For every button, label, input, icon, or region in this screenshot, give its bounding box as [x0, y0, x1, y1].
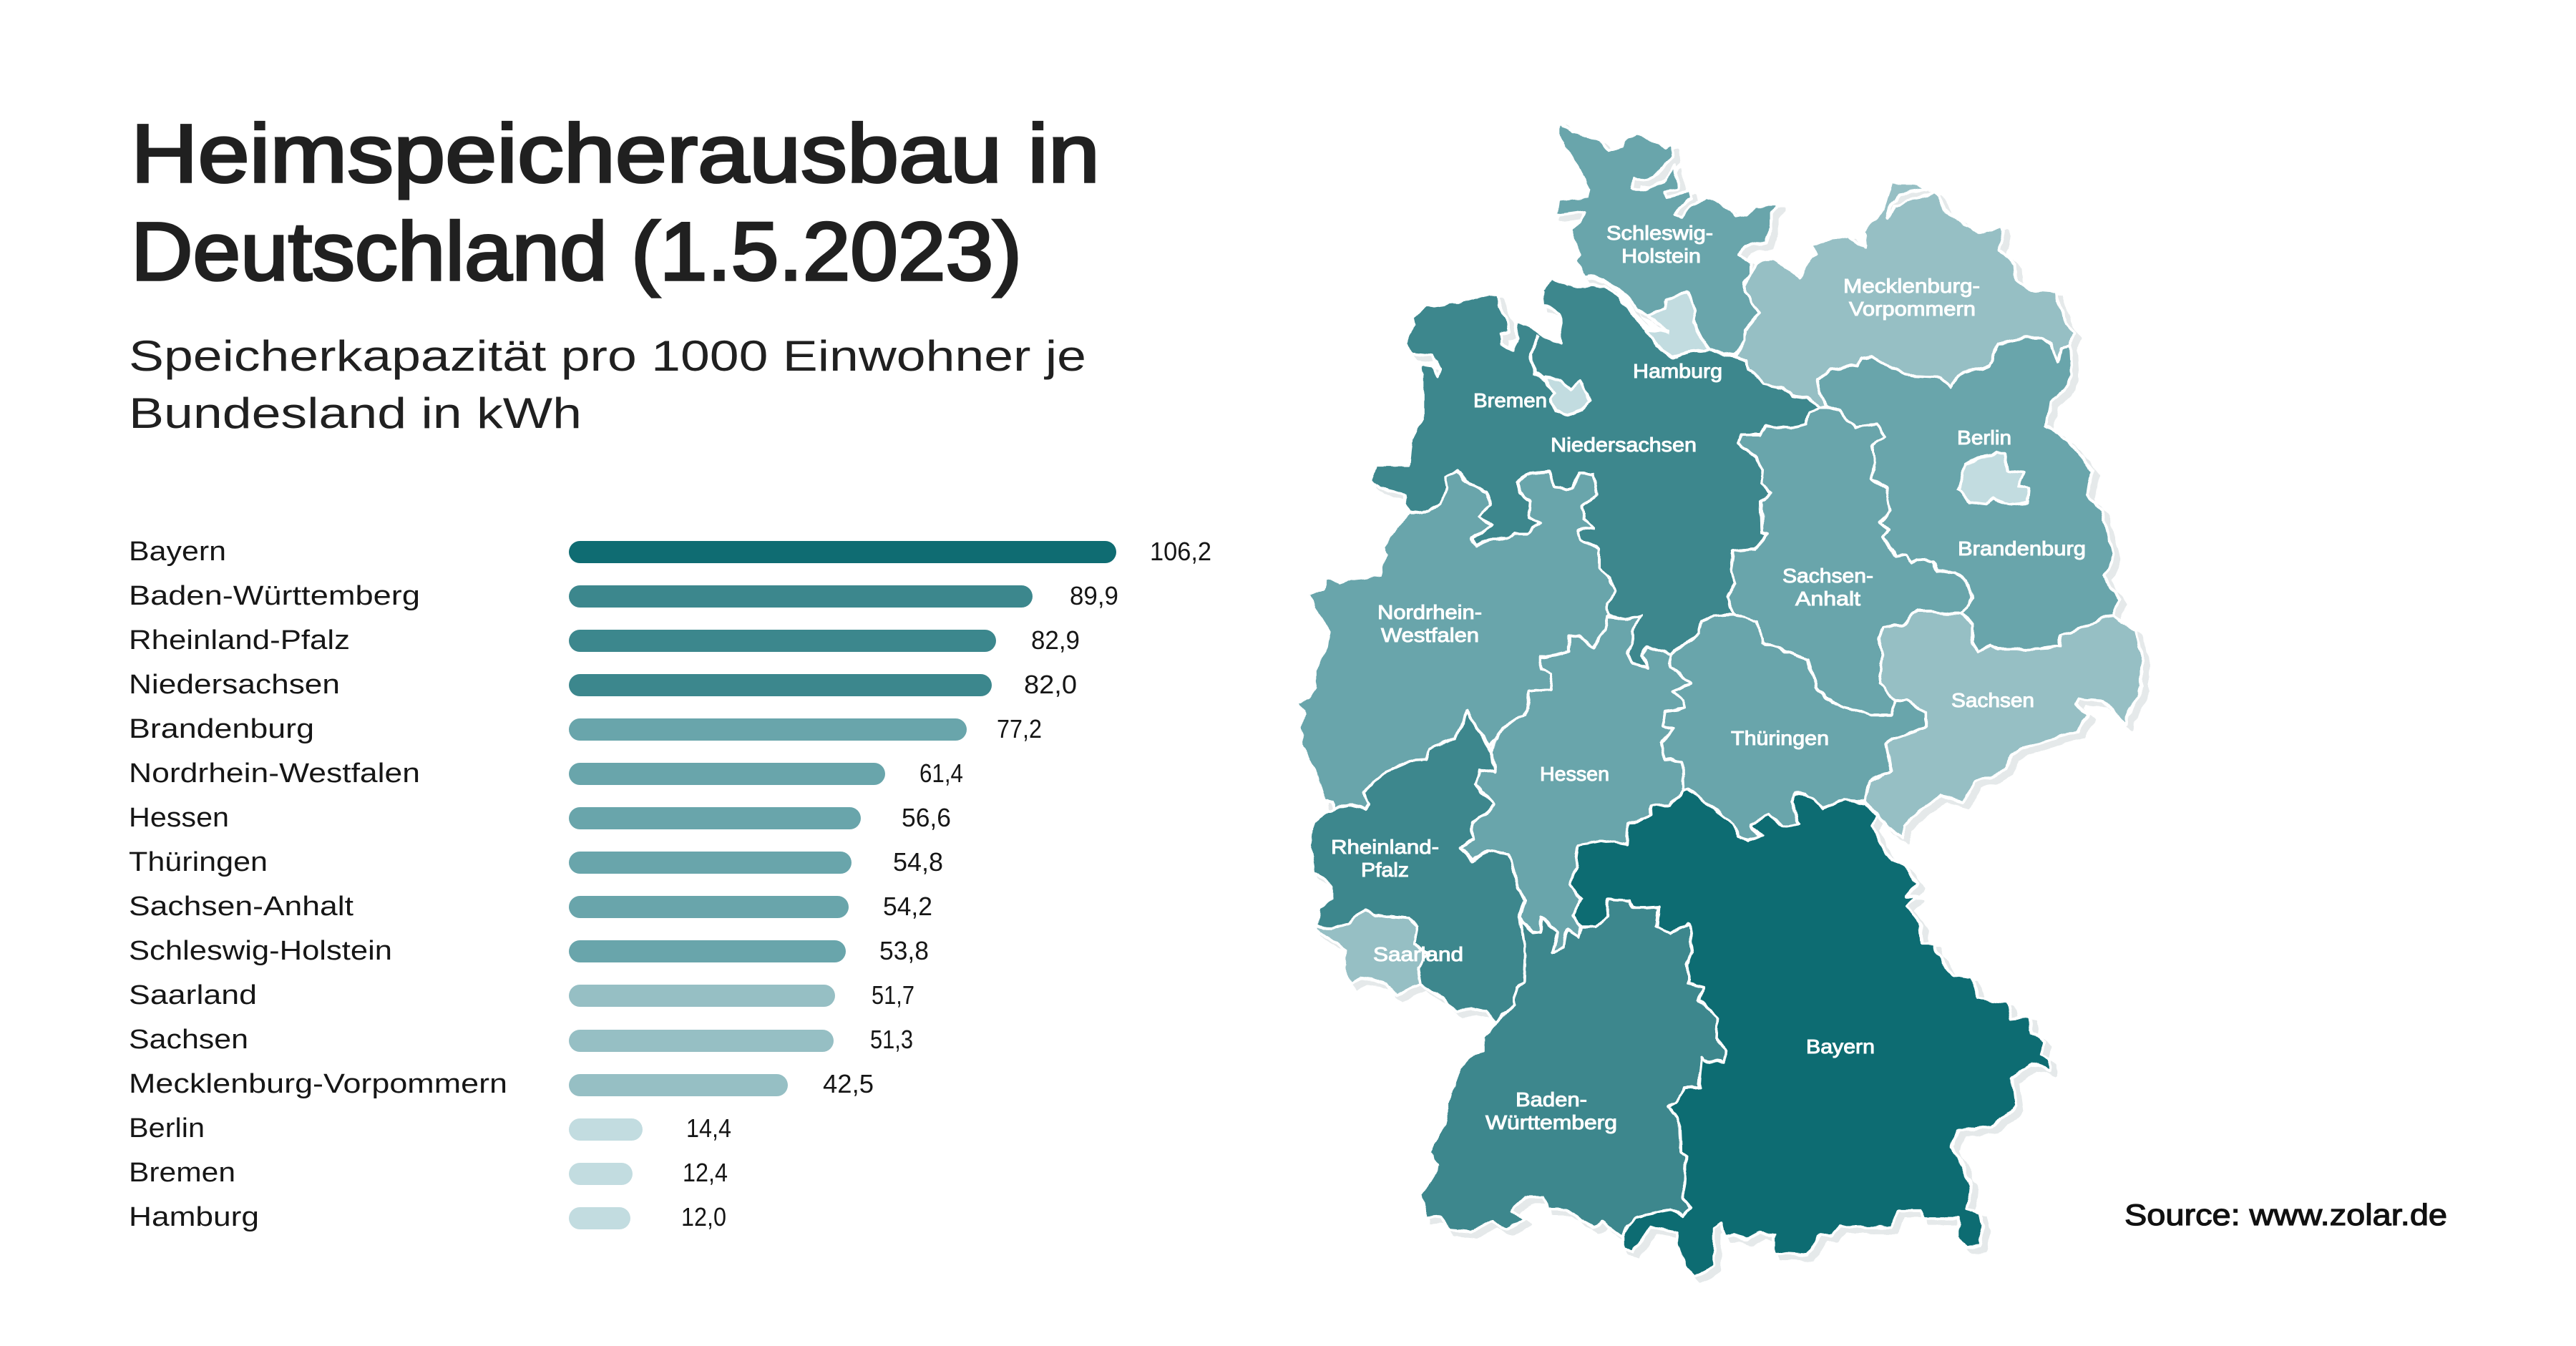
map labels: Rheinland- [1331, 836, 1439, 858]
row: Saarland: 51,7 [872, 980, 914, 1010]
row: Bremen: Bremen [129, 1158, 235, 1188]
region: Brandenburg [1817, 338, 2119, 653]
title: Heimspeicherausbau in [131, 108, 1100, 200]
title: Deutschland (1.5.2023) [131, 206, 1022, 298]
row: Saarland [129, 980, 914, 1010]
region: Bayern [1570, 790, 2050, 1277]
region: Baden-Württemberg [1420, 899, 1725, 1237]
row: Rheinland-Pfalz [129, 625, 1080, 655]
row: Schleswig-Holstein: 53,8 [879, 936, 929, 965]
map labels: Anhalt [1795, 587, 1860, 610]
map labels: Thüringen [1731, 727, 1829, 749]
row: Nordrhein-Westfalen: 61,4 [919, 759, 963, 788]
row: Berlin [129, 1113, 731, 1143]
row: Niedersachsen: Niedersachsen [129, 670, 340, 700]
row: Sachsen-Anhalt: Sachsen-Anhalt [129, 892, 354, 922]
map labels [1331, 222, 2086, 1133]
row: Bayern: 106,2 [1150, 537, 1211, 566]
region: Mecklenburg-Vorpommern [1734, 183, 2074, 409]
map labels: Hessen [1540, 763, 1609, 785]
subtitle [129, 332, 1086, 437]
row: Berlin: Berlin [129, 1113, 205, 1143]
row: Brandenburg: 77,2 [997, 714, 1042, 743]
row: Mecklenburg-Vorpommern [129, 1069, 874, 1099]
row: Rheinland-Pfalz: Rheinland-Pfalz [129, 625, 350, 655]
map labels: Sachsen- [1782, 565, 1873, 587]
map labels: Bayern [1806, 1035, 1875, 1058]
subtitle: Bundesland in kWh [129, 389, 582, 437]
region: Hessen [1460, 615, 1691, 952]
row: Sachsen: 51,3 [870, 1025, 913, 1054]
map labels: Brandenburg [1958, 537, 2086, 560]
row: Schleswig-Holstein: Schleswig-Holstein [129, 936, 392, 966]
row: Rheinland-Pfalz: 82,9 [1031, 625, 1080, 655]
map labels: Nordrhein- [1377, 601, 1482, 623]
row: Mecklenburg-Vorpommern: 42,5 [823, 1069, 874, 1098]
row: Bremen [129, 1158, 728, 1188]
bar chart [129, 537, 1211, 1232]
row: Bremen: 12,4 [683, 1158, 728, 1187]
map labels: Württemberg [1485, 1111, 1617, 1133]
title [131, 108, 1100, 298]
row: Hamburg: 12,0 [681, 1202, 726, 1232]
map labels: Sachsen [1951, 689, 2034, 711]
row: Hamburg [129, 1202, 726, 1232]
row: Mecklenburg-Vorpommern: Mecklenburg-Vorpommern [129, 1069, 507, 1099]
row: Schleswig-Holstein [129, 936, 929, 966]
row: Nordrhein-Westfalen: Nordrhein-Westfalen [129, 759, 420, 789]
row: Hessen [129, 803, 951, 833]
row: Berlin: 14,4 [686, 1113, 731, 1143]
map labels: Berlin [1957, 426, 2011, 449]
row: Baden-Württemberg: 89,9 [1070, 581, 1118, 610]
row: Niedersachsen: 82,0 [1024, 670, 1077, 699]
map of Germany [1297, 123, 2142, 1277]
row: Bayern: Bayern [129, 537, 226, 567]
map labels: Mecklenburg- [1843, 275, 1980, 297]
river: Weser channel [1533, 336, 1545, 380]
region: Saarland [1317, 909, 1429, 994]
region: Rheinland-Pfalz [1310, 711, 1526, 1023]
row: Hamburg: Hamburg [129, 1202, 259, 1232]
row: Brandenburg [129, 714, 1042, 744]
row: Nordrhein-Westfalen [129, 759, 963, 789]
row: Saarland: Saarland [129, 980, 257, 1010]
region: Berlin [1958, 452, 2028, 504]
row: Sachsen-Anhalt: 54,2 [883, 892, 932, 921]
row: Hessen: Hessen [129, 803, 229, 833]
row: Niedersachsen [129, 670, 1077, 700]
region: Niedersachsen [1372, 278, 1820, 668]
region: Sachsen-Anhalt [1727, 409, 1972, 715]
region: Sachsen [1866, 611, 2142, 839]
map labels: Vorpommern [1849, 298, 1976, 320]
row: Hessen: 56,6 [902, 803, 951, 832]
row: Sachsen [129, 1025, 913, 1055]
map labels: Baden- [1516, 1088, 1587, 1111]
map labels: Bremen [1473, 389, 1547, 411]
row: Thüringen: Thüringen [129, 847, 268, 877]
map labels: Niedersachsen [1551, 434, 1697, 456]
map labels: Pfalz [1361, 859, 1409, 881]
source note: Source: www.zolar.de [2124, 1198, 2447, 1232]
map labels: Saarland [1373, 943, 1463, 965]
row: Thüringen [129, 847, 943, 877]
region: Schleswig-Holstein [1556, 123, 1779, 354]
map labels: Westfalen [1381, 624, 1479, 646]
row: Baden-Württemberg [129, 581, 1118, 611]
river: Elbe [1587, 278, 1669, 332]
region: Nordrhein-Westfalen [1297, 471, 1614, 811]
region: Thüringen [1662, 614, 1926, 841]
map labels: Schleswig- [1606, 222, 1713, 244]
map labels: Hamburg [1633, 360, 1722, 382]
row: Sachsen-Anhalt [129, 892, 932, 922]
region: Hamburg [1646, 292, 1711, 358]
region: Bremen [1544, 378, 1590, 416]
row: Bayern [129, 537, 1211, 567]
subtitle: Speicherkapazität pro 1000 Einwohner je [129, 332, 1086, 380]
map labels: Holstein [1621, 245, 1701, 267]
row: Brandenburg: Brandenburg [129, 714, 314, 744]
row: Thüringen: 54,8 [893, 847, 943, 877]
row: Sachsen: Sachsen [129, 1025, 248, 1055]
row: Baden-Württemberg: Baden-Württemberg [129, 581, 420, 611]
